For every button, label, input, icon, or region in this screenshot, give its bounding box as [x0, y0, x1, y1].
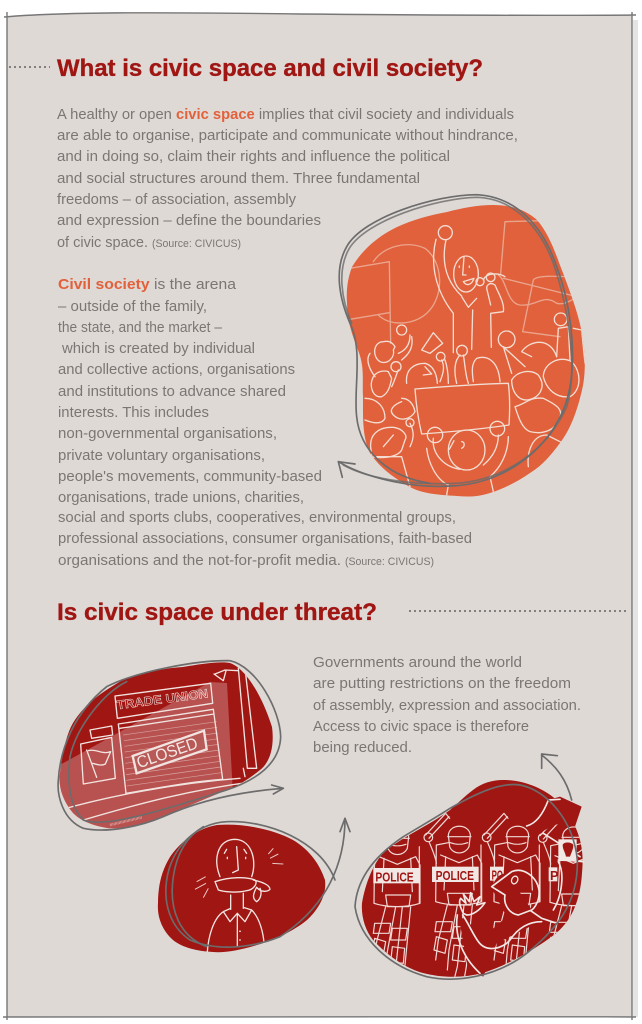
text block: civic space definition: and social structures around them. Three fundamental: [57, 170, 420, 187]
crowd middle with sign: [415, 345, 510, 495]
text block: civil society definition: Civil society is the arena: [58, 276, 237, 293]
labels: police shields: PO: [492, 868, 503, 882]
labels: police shields: POLICE: [436, 869, 474, 883]
speaker: [434, 226, 505, 353]
text block: civic space definition: (Source: CIVICUS): [152, 238, 241, 250]
text block: civil society definition: professional associations, consumer organisations, faith-based: [58, 530, 472, 547]
arrow: police loop: [355, 754, 577, 979]
text block: civil society definition: the state, and the market –: [58, 319, 223, 336]
illustration: gagged person blob: [158, 818, 350, 952]
text block: restrictions: [313, 654, 581, 756]
heading: what is civic space: What is civic space and civil society?: [57, 55, 483, 82]
labels: police shields: [373, 867, 559, 884]
illustration: police line blob: [355, 754, 596, 982]
label: trade union sign: TRADE UNION: [116, 686, 209, 712]
text block: restrictions: Governments around the world: [313, 654, 522, 671]
text block: civil society definition: people's movements, community-based: [58, 468, 322, 485]
protester with flag: [457, 797, 583, 977]
text block: civil society definition: non-governmental organisations,: [58, 425, 277, 442]
arrow: loop around crowd: [338, 195, 573, 486]
crowd right: [498, 313, 585, 467]
labels: police shields: POLICE: [375, 870, 414, 884]
text block: civil society definition: organisations and the not-for-profit media.: [58, 552, 341, 569]
text block: civil society definition: – outside of the family,: [58, 298, 207, 315]
background placards: [350, 221, 577, 343]
text block: civil society definition: private voluntary organisations,: [58, 447, 265, 464]
text block: restrictions: of assembly, expression and association.: [313, 697, 581, 714]
text block: civil society definition: [58, 276, 472, 569]
text block: civil society definition: (Source: CIVICUS): [345, 556, 434, 568]
text block: civic space definition: and expression – define the boundaries: [57, 212, 321, 229]
text block: civil society definition: interests. This includes: [58, 404, 209, 421]
text block: civic space definition: [57, 106, 518, 251]
text block: civil society definition: and institutions to advance shared: [58, 383, 286, 400]
text block: civil society definition: and collective actions, organisations: [58, 361, 295, 378]
text block: civil society definition: which is created by individual: [61, 340, 255, 357]
text block: civic space definition: are able to organise, participate and communicate without hindrance,: [57, 127, 518, 144]
text block: civic space definition: and in doing so, claim their rights and influence the political: [57, 148, 450, 165]
text block: restrictions: Access to civic space is therefore: [313, 718, 529, 735]
police officers: [372, 812, 582, 977]
text block: civil society definition: social and sports clubs, cooperatives, environmental groups,: [58, 509, 456, 526]
crowd left: [365, 325, 448, 487]
heading: under threat: Is civic space under threat?: [57, 599, 377, 626]
person: [195, 839, 283, 952]
text block: restrictions: are putting restrictions on the freedom: [313, 675, 571, 692]
text block: civic space definition: of civic space.: [57, 234, 148, 251]
illustration: protest crowd blob: [338, 195, 585, 497]
text block: civil society definition: organisations, trade unions, charities,: [58, 489, 304, 506]
illustration: closed trade union blob: [58, 661, 283, 832]
labels: police shields: P: [550, 869, 559, 883]
text block: restrictions: being reduced.: [313, 739, 412, 756]
label: closed sign: CLOSED: [134, 734, 200, 772]
text block: civic space definition: A healthy or open civic space implies that civil society and individuals: [57, 106, 514, 123]
arrow: union loop: [58, 661, 283, 830]
text block: civic space definition: freedoms – of association, assembly: [57, 191, 296, 208]
arrow: person loop: [166, 818, 350, 947]
